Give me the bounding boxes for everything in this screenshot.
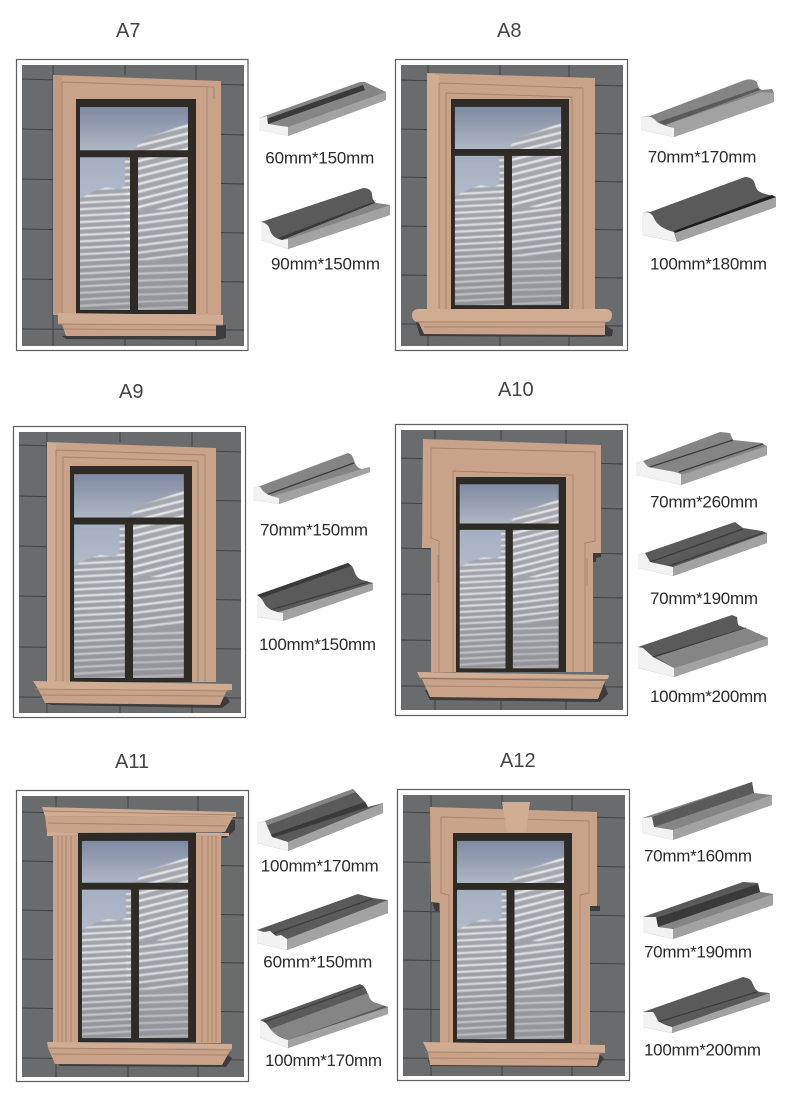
moulding profile 100mm*200mm: 100mm*200mm [644, 1041, 761, 1060]
moulding profile 100mm*200mm: 100mm*200mm [650, 687, 767, 706]
moulding profile 70mm*170mm [641, 79, 774, 167]
window illustration A11 [16, 790, 248, 1082]
panel: A8 [396, 20, 776, 350]
title: A9: A9 [119, 381, 143, 403]
moulding profile 70mm*160mm [642, 782, 772, 866]
panel: A11 [16, 751, 388, 1082]
moulding profile 100mm*150mm [257, 563, 376, 654]
window illustration A7 [16, 60, 248, 350]
moulding profile 60mm*150mm [257, 894, 388, 972]
title: A12: A12 [500, 750, 536, 772]
panel: A12 [398, 750, 773, 1080]
moulding profile 70mm*190mm: 70mm*190mm [650, 589, 758, 608]
moulding profile 70mm*150mm: 70mm*150mm [260, 521, 368, 540]
moulding profile 60mm*150mm: 60mm*150mm [265, 148, 374, 167]
title: A7: A7 [116, 20, 140, 42]
moulding profile 100mm*180mm: 100mm*180mm [650, 254, 767, 273]
window illustration A9 [14, 426, 246, 718]
panel: A7 [16, 20, 390, 350]
window illustration A8 [396, 60, 628, 350]
moulding profile 100mm*180mm [642, 177, 776, 273]
moulding profile 70mm*150mm [253, 453, 370, 540]
moulding profile 60mm*150mm: 60mm*150mm [263, 953, 372, 972]
moulding profile 90mm*150mm [261, 188, 390, 274]
moulding profile 90mm*150mm: 90mm*150mm [271, 254, 380, 274]
moulding profile 70mm*170mm: 70mm*170mm [648, 148, 756, 167]
moulding profile 100mm*170mm lower: 100mm*170mm [265, 1051, 382, 1070]
moulding profile 70mm*260mm [636, 432, 767, 512]
moulding profile 100mm*200mm [643, 977, 770, 1060]
moulding profile 100mm*200mm [638, 615, 768, 706]
moulding profile 100mm*170mm lower [260, 984, 388, 1070]
title: A11: A11 [115, 751, 149, 773]
moulding profile 60mm*150mm [259, 82, 386, 167]
window illustration A12 [398, 790, 630, 1080]
title: A10: A10 [498, 379, 534, 401]
moulding profile 70mm*160mm: 70mm*160mm [644, 847, 752, 866]
moulding profile 70mm*190mm: 70mm*190mm [644, 943, 752, 962]
moulding profile 70mm*190mm [638, 522, 767, 608]
moulding profile 100mm*170mm: 100mm*170mm [261, 857, 379, 876]
moulding profile 100mm*170mm [257, 789, 383, 876]
panel: A10 [396, 379, 768, 716]
title: A8: A8 [497, 20, 521, 42]
keystone [502, 802, 530, 832]
moulding profile 70mm*260mm: 70mm*260mm [650, 493, 758, 512]
window illustration A10 [396, 424, 628, 716]
moulding profile 100mm*150mm: 100mm*150mm [259, 635, 376, 654]
moulding profile 70mm*190mm [643, 882, 773, 962]
panel: A9 [14, 381, 376, 718]
